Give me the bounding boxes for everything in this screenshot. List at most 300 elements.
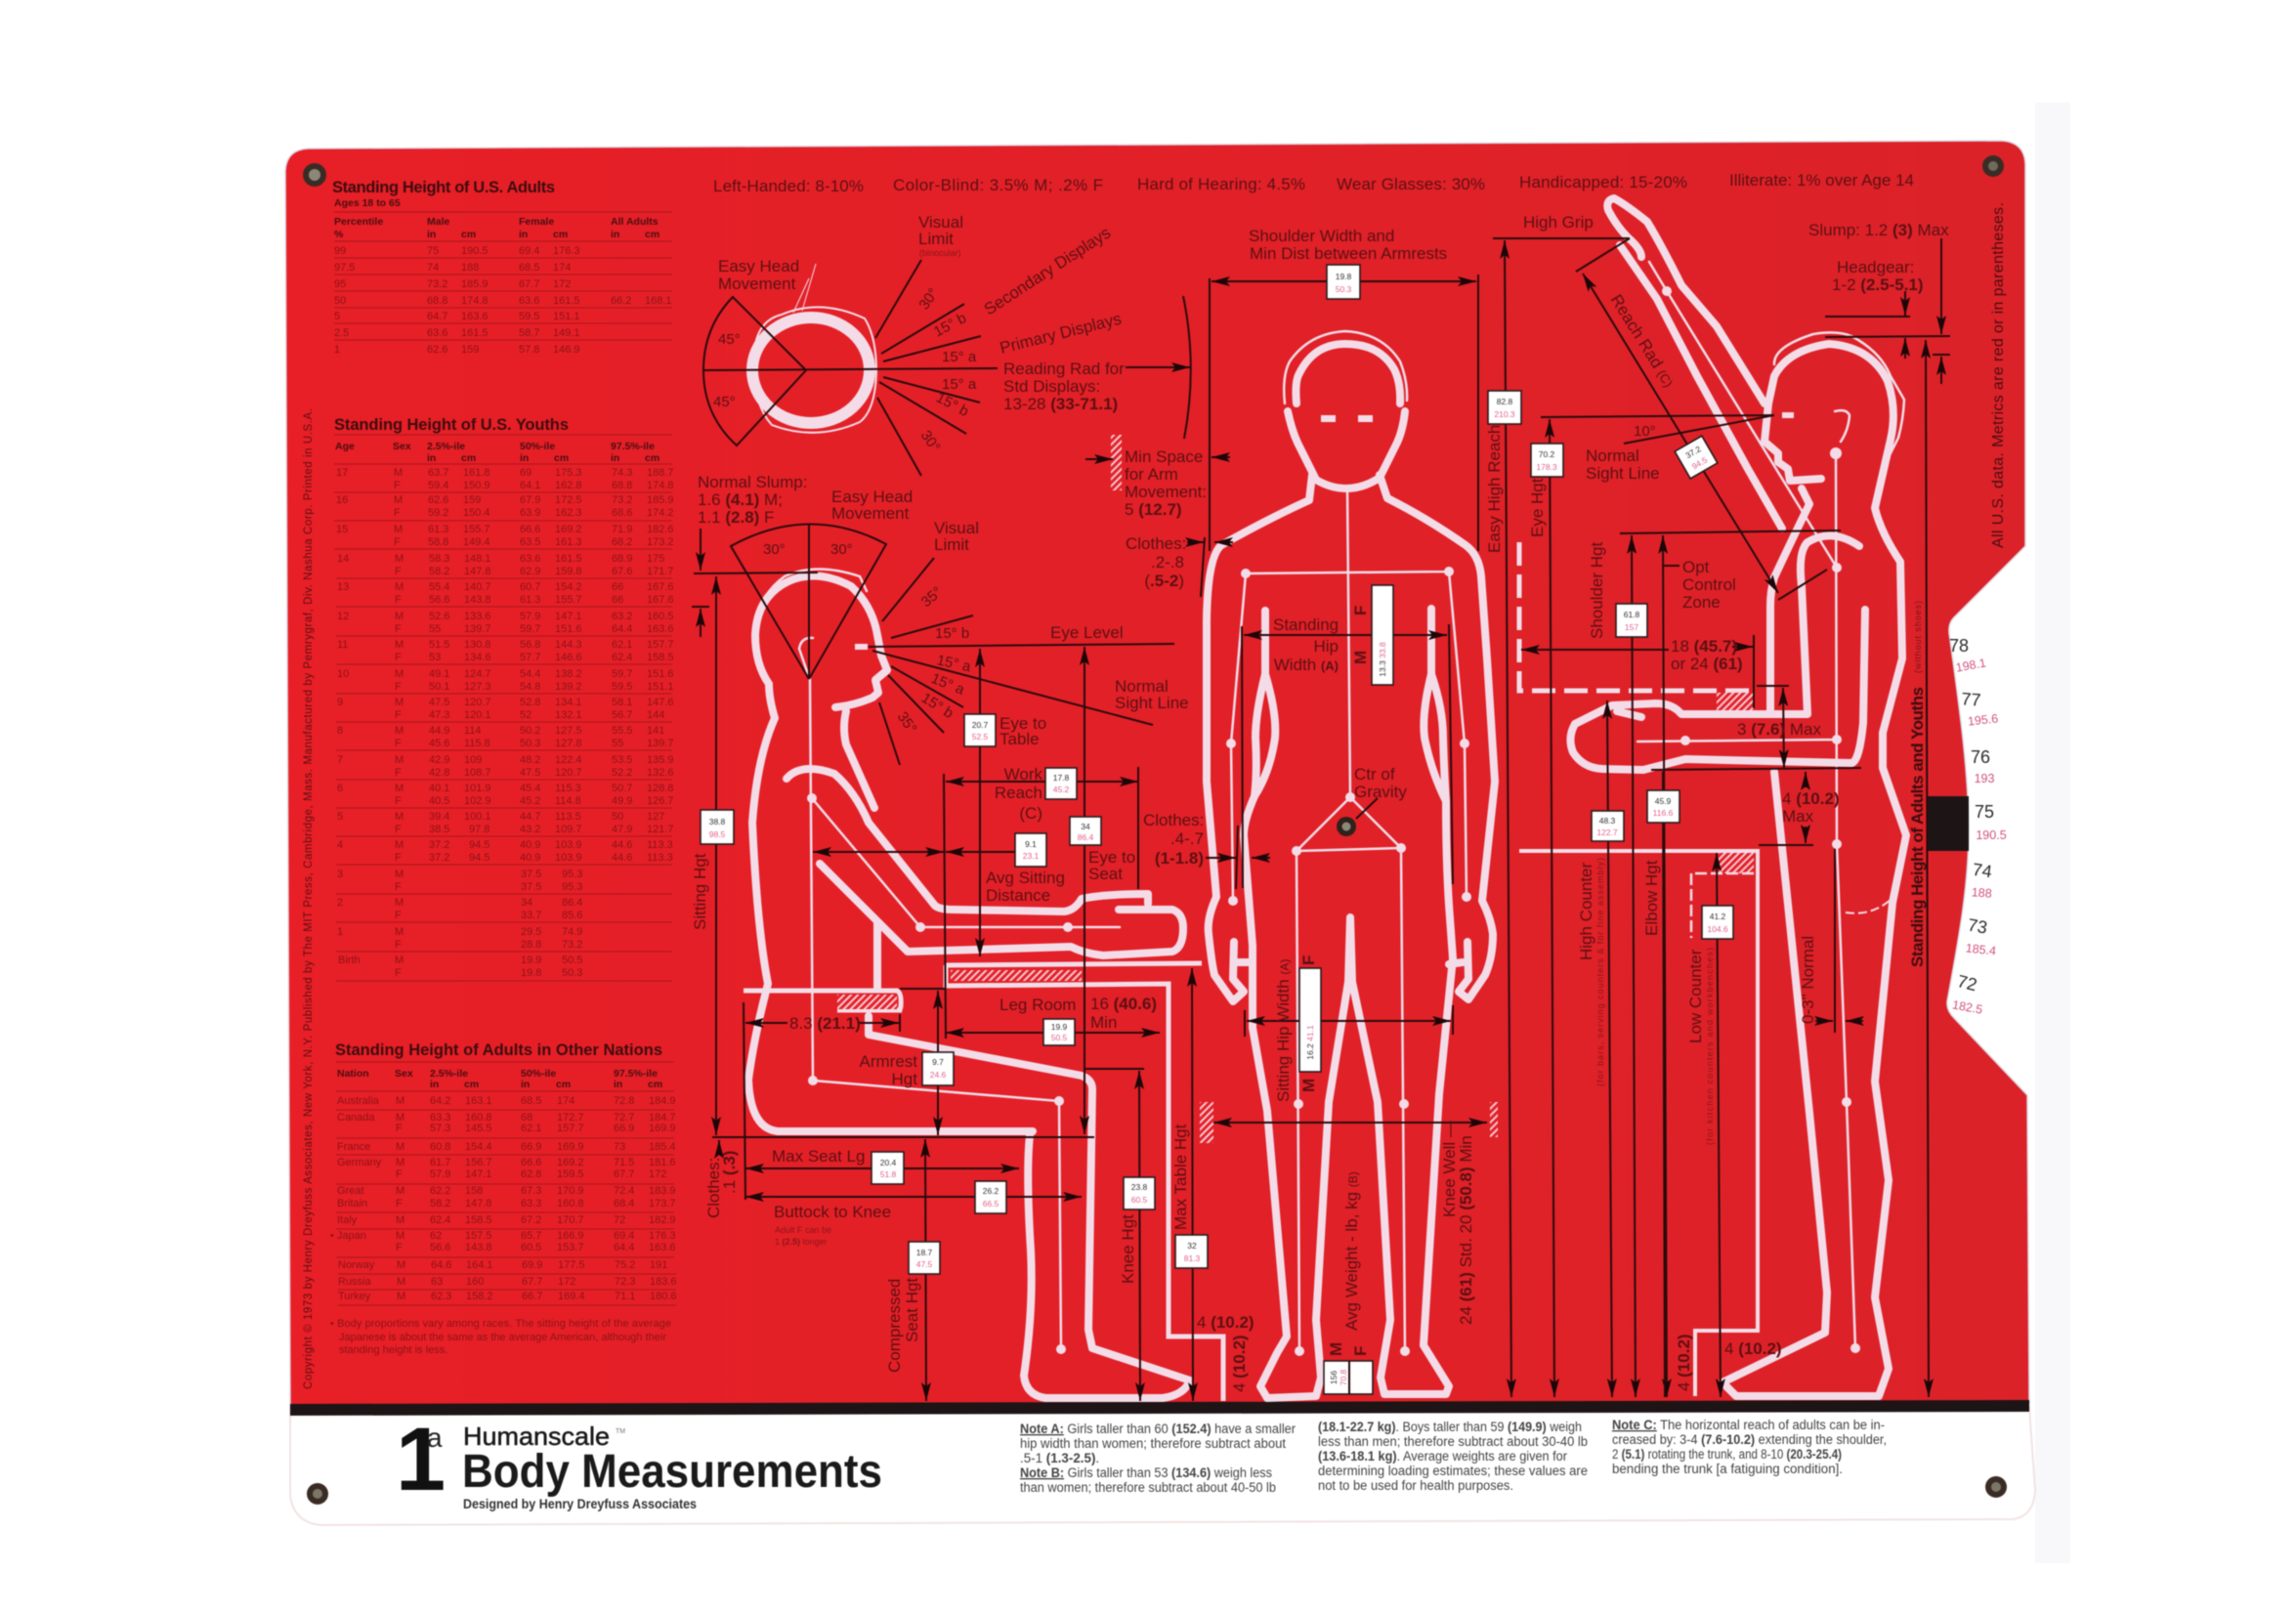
labels: standing side: Sight Line: [1586, 464, 1660, 483]
panel: standing height of US adults table: [332, 179, 672, 356]
rivet top right: [1982, 155, 2004, 177]
labels: standing side: Eye Hgt: [1528, 478, 1547, 537]
eyes: [1321, 415, 1373, 422]
statistics strip: Illiterate: 1% over Age 14: [1729, 171, 1914, 190]
panel: standing height of US adults table: 174.8: [461, 295, 489, 307]
numeral 1a: 1: [396, 1410, 446, 1509]
labels: standing side: 18 (45.7): [1671, 637, 1737, 656]
labels: standing side: or 24 (61): [1671, 655, 1743, 673]
panel: standing height of US adults table: 63.6: [519, 295, 539, 307]
panel: standing height of adults in other nations table: 71.5: [614, 1157, 634, 1168]
labels: standing side: High Grip: [1523, 213, 1594, 232]
height dial numbers: 190.5: [1976, 828, 2007, 842]
height dial numbers: 193: [1975, 772, 1994, 785]
labels: angles: [713, 285, 977, 455]
labels: seated figure: 30°: [763, 541, 786, 558]
high grip and easy high reach: [1493, 238, 1630, 1397]
head outline: [1288, 344, 1405, 488]
panel: standing height of adults in other nations table: 147.1: [465, 1168, 492, 1180]
panel: standing height of adults in other nations table: M: [397, 1291, 405, 1302]
panel: standing height of US youths table: 45.4: [520, 783, 540, 794]
panel: standing height of US youths table: 50.3: [520, 738, 540, 749]
value box: shoulder width: 19.8: [1336, 272, 1352, 281]
value box: easy high reach: [1488, 391, 1521, 424]
panel: standing height of adults in other nations table: 62.8: [521, 1168, 541, 1180]
labels: seated figure: 15° a: [929, 670, 967, 699]
numeral 1a: a: [427, 1422, 443, 1453]
panel: standing height of adults in other nations table: 57.9: [430, 1168, 450, 1180]
panel: standing height of US youths table: 167.6: [647, 594, 674, 606]
labels: standing figure: (.5-2): [1144, 572, 1184, 590]
value box: leg room: 50.5: [1051, 1033, 1068, 1042]
panel: standing height of adults in other nations table: Turkey: [338, 1291, 371, 1302]
panel: standing height of US youths table: F: [395, 709, 402, 721]
panel: standing height of US youths table: 40.5: [429, 795, 449, 807]
panel: standing height of US youths table: 51.5: [429, 639, 449, 651]
panel: standing height of US youths table: 59.4: [428, 480, 448, 491]
panel: standing height of US youths table: 29.5: [521, 926, 541, 938]
panel: standing height of US youths table: 61.3: [428, 524, 448, 535]
notes column 1: [1020, 1421, 1297, 1495]
notes column 2: (18.1-22.7 kg). Boys taller than 59 (149.9) weigh: [1318, 1420, 1582, 1434]
panel: standing height of US youths table: 58.3: [429, 553, 449, 565]
notes column 1: Note A: Girls taller than 60 (152.4) have a smaller: [1020, 1421, 1297, 1436]
labels: standing figure: .2-.8: [1151, 553, 1184, 572]
labels: seated figure: 15° b: [918, 690, 957, 722]
height dial numbers: 195.6: [1967, 711, 1999, 729]
diagram: top view of head with vision angles: [703, 213, 1191, 476]
panel: standing height of US youths table: 47.3: [429, 709, 449, 721]
notes column 3: creased by: 3-4 (7.6-10.2) extending the shoulder,: [1612, 1432, 1887, 1447]
panel: standing height of US youths table: 162.3: [555, 507, 582, 519]
panel: standing height of US youths table: 175.3: [555, 467, 582, 479]
display arc: [1183, 296, 1191, 439]
panel: standing height of US youths table: 59.2: [428, 507, 448, 519]
panel: standing height of adults in other nations table: 67.3: [521, 1185, 541, 1197]
panel: standing height of adults in other nations table: 67.2: [521, 1214, 541, 1226]
panel: standing height of US youths table: 1: [337, 926, 343, 938]
panel: standing height of US youths table: 113.3: [647, 852, 673, 864]
labels: standing side: [1485, 202, 2007, 1391]
panel: standing height of adults in other nations table: M: [396, 1095, 404, 1107]
panel: standing height of adults in other nations table: M: [397, 1259, 405, 1271]
value box: compressed seat: 47.5: [916, 1259, 933, 1269]
panel: standing height of US youths table: F: [395, 566, 402, 577]
panel: standing height of US youths table: 68.2: [612, 536, 632, 548]
panel: standing height of adults in other nations table: 180.6: [650, 1291, 677, 1302]
value box: knee height: 23.8: [1131, 1182, 1148, 1192]
panel: standing height of US youths table: 95.3: [562, 881, 582, 893]
labels: seated figure: (C): [1019, 804, 1042, 823]
head ring: [752, 264, 876, 433]
panel: standing height of adults in other nations table: M: [396, 1157, 404, 1168]
panel: standing height of adults in other nations table: 62: [430, 1230, 442, 1242]
panel: standing height of US youths table: 42.9: [429, 754, 449, 766]
labels: standing side: All U.S. data. Metrics are red or in parentheses.: [1990, 202, 2007, 548]
leg room: [946, 1032, 1160, 1034]
panel: standing height of US youths table: 55: [612, 738, 623, 749]
height scale label: Standing Height of Adults and Youths: [1908, 687, 1927, 967]
panel: standing height of US youths table: 121.7: [647, 824, 674, 835]
panel: standing height of US youths table: cm: [461, 452, 476, 464]
panel: standing height of US youths table: 50.1: [429, 681, 449, 693]
panel: standing height of US youths table: 124.7: [464, 668, 491, 680]
panel: standing height of US youths table: M: [395, 553, 404, 565]
panel: standing height of adults in other nations table: 176.3: [649, 1230, 676, 1242]
panel: standing height of US youths table: 174.2: [647, 507, 674, 519]
panel: standing height of adults in other nations table: 164.1: [466, 1259, 493, 1271]
panel: standing height of adults in other nations table: 169.9: [557, 1141, 584, 1153]
labels: seated figure: 1.1 (2.8) F: [698, 508, 774, 527]
right arm: [1380, 475, 1495, 999]
panel: standing height of US adults table: in: [611, 229, 619, 240]
labels: standing side: Opt: [1682, 558, 1710, 576]
panel: standing height of US youths table: F: [395, 910, 402, 921]
panel: standing height of US youths table: 52.8: [520, 697, 540, 708]
panel: standing height of US youths table: 6: [337, 783, 343, 794]
panel: standing height of adults in other nations table: 154.4: [465, 1141, 492, 1153]
panel: standing height of adults in other nations table: 145.5: [465, 1123, 492, 1134]
compressed seat height: [925, 1139, 926, 1401]
labels: seated figure: Sitting Hgt: [691, 853, 709, 930]
panel: standing height of US youths table: 68.8: [612, 480, 632, 491]
panel: standing height of US youths table: 159: [463, 494, 481, 506]
panel: standing height of adults in other nations table: Norway: [338, 1259, 375, 1271]
panel: standing height of US youths table: 95.3: [562, 869, 582, 880]
diagram: seated vision angles and dimensions: [691, 473, 1254, 1401]
panel: standing height of US youths table: 161.3: [555, 536, 582, 548]
labels: seated figure: Max Table Hgt: [1171, 1124, 1190, 1230]
panel: standing height of adults in other nations table: in: [521, 1079, 530, 1090]
panel: standing height of US youths table: 134.1: [555, 697, 582, 708]
panel: standing height of US youths table: F: [395, 623, 402, 635]
panel: standing height of US youths table: 138.2: [555, 668, 582, 680]
panel: standing height of US youths table: 63.2: [612, 611, 632, 622]
panel: standing height of US adults table: Female: [519, 216, 554, 228]
value box: armrest: 24.6: [930, 1070, 947, 1080]
labels: standing figure: Gravity: [1354, 783, 1407, 801]
labels: standing side: Headgear:: [1837, 258, 1914, 276]
labels: seated figure: Knee Hgt: [1119, 1214, 1137, 1284]
panel: standing height of adults in other nations table: 68.5: [521, 1095, 541, 1107]
panel: standing height of US youths table: cm: [554, 452, 569, 464]
panel: standing height of adults in other nations table: 172: [558, 1276, 575, 1288]
labels: angles: 15° b: [933, 390, 971, 420]
notes column 3: bending the trunk [a fatiguing condition].: [1612, 1462, 1843, 1476]
panel: standing height of US adults table: 159: [461, 344, 479, 356]
panel: standing height of adults in other nations table: 66.9: [614, 1123, 634, 1134]
panel: standing height of adults in other nations table: in: [430, 1079, 439, 1090]
skeleton: [1231, 488, 1467, 1351]
panel: standing height of adults in other nations table: F: [396, 1123, 403, 1134]
labels: seated figure: Min: [1090, 1013, 1117, 1032]
value box: elbow height: 45.9: [1655, 796, 1672, 806]
centre of gravity rivet: [1337, 798, 1378, 836]
labels: seated figure: 1.6 (4.1) M;: [698, 490, 783, 509]
labels: display types: Reading Rad for: [1003, 360, 1125, 378]
eye to table and eye to seat dimensions: [980, 647, 1084, 1134]
panel: standing height of US youths table: 173.2: [647, 536, 674, 548]
panel: standing height of US adults table: in: [427, 229, 436, 240]
labels: display types: 13-28 (33-71.1): [1003, 395, 1118, 413]
statistics strip: Handicapped: 15-20%: [1519, 173, 1687, 191]
panel: standing height of US youths table: 50.3: [562, 967, 582, 979]
panel: standing height of US youths table: 127.5: [555, 725, 582, 737]
panel: standing height of US youths table: 185.9: [647, 494, 674, 506]
head movement wedge: [703, 297, 998, 445]
panel: standing height of adults in other nations table: in: [614, 1079, 622, 1090]
panel: standing height of adults in other nations table: 169.4: [558, 1291, 585, 1302]
panel: standing height of US youths table: F: [394, 480, 401, 491]
panel: standing height of US adults table: 151.1: [553, 311, 580, 322]
panel: standing height of US youths table: 56.7: [612, 709, 632, 721]
statistics strip: Left-Handed: 8-10%: [713, 177, 864, 195]
panel: standing height of US youths table: 63.9: [520, 507, 540, 519]
panel: standing height of US adults table: 67.7: [519, 278, 539, 290]
panel: standing height of adults in other nations table: Canada: [337, 1112, 375, 1124]
panel: standing height of US youths table: 59.7: [612, 668, 632, 680]
head, back and leg: [1722, 344, 1906, 1396]
labels: standing side: 3 (7.6) Max: [1737, 720, 1821, 739]
slump and headgear marks: [1825, 238, 1950, 384]
panel: standing height of adults in other nations table: Italy: [337, 1214, 358, 1226]
panel: standing height of US youths table: 54.8: [520, 681, 540, 693]
panel: standing height of US youths table: M: [395, 611, 404, 622]
panel: standing height of adults in other nations table: F: [396, 1168, 403, 1180]
value box: sitting hip width: [1299, 968, 1321, 1072]
labels: standing side: Max: [1782, 807, 1814, 826]
panel: standing height of US youths table: 108.7: [464, 767, 491, 779]
value box: elbow height: 116.6: [1653, 808, 1674, 818]
panel: standing height of US youths table: 149.4: [463, 536, 490, 548]
labels: standing figure: Min Dist between Armrests: [1250, 244, 1447, 263]
panel: standing height of US youths table: 114.8: [555, 795, 581, 807]
panel: standing height of adults in other nations table: Great: [337, 1185, 364, 1197]
panel: standing height of adults in other nations table: cm: [464, 1079, 479, 1090]
labels: standing figure: Ctr of: [1354, 765, 1395, 784]
diagram: min space for arm movement: 5 (12.7): [1125, 500, 1182, 519]
panel: standing height of US youths table: M: [394, 467, 403, 479]
labels: standing side: 0-3" Normal: [1799, 936, 1817, 1024]
panel: standing height of US youths table: 182.6: [647, 524, 674, 535]
panel: standing height of adults in other nations table: F: [396, 1242, 403, 1253]
panel: standing height of US youths table: 53.5: [612, 754, 632, 766]
panel: standing height of adults in other nations table: 60.8: [430, 1141, 450, 1153]
panel: standing height of adults in other nations table: 169.9: [649, 1123, 676, 1134]
opt control zone: [1663, 535, 1679, 1397]
labels: standing figure: Shoulder Width and: [1249, 227, 1394, 245]
labels: angles: 15° a: [942, 376, 977, 393]
panel: standing height of US youths table: 143.8: [464, 594, 491, 606]
knee height: [1085, 1069, 1144, 1401]
panel: standing height of US youths table: 58.8: [428, 536, 448, 548]
panel: standing height of adults in other nations table: M: [396, 1230, 404, 1242]
panel: standing height of US youths table: M: [395, 754, 404, 766]
value box: max table: 32: [1187, 1241, 1197, 1251]
panel: standing height of US youths table: 158.5: [647, 652, 674, 663]
labels: standing side: 4 (10.2): [1724, 1339, 1782, 1358]
max seat length: [745, 1167, 1019, 1169]
panel: standing height of US youths table: 69: [520, 467, 531, 479]
panel: standing height of US adults table: 64.7: [427, 311, 447, 322]
labels: seated figure: 35°: [894, 709, 920, 737]
panel: standing height of US youths table: 132.1: [555, 709, 582, 721]
panel: standing height of US youths table: 126.7: [647, 795, 674, 807]
high counter, elbow, low counter dimensions: [1607, 700, 1721, 1397]
panel: standing height of adults in other nations table: 2.5%-ile: [430, 1068, 468, 1080]
credit line vertical: Copyright © 1973 by Henry Dreyfuss Associates, New York, N.Y. Published by The MIT Press, Cambridge, Mass. Manufactured by Pemrygraf, Div. Nashua Corp. Printed in U.S.A.: [303, 408, 315, 1389]
diagram: min space for arm movement: [1085, 435, 1207, 519]
knee well: [1200, 1102, 1498, 1143]
value box: knee height: [1124, 1177, 1155, 1209]
labels: standing figure: F: [1351, 1346, 1370, 1356]
labels: standing figure: Standing: [1273, 615, 1339, 634]
panel: standing height of US youths table: 45.6: [429, 738, 449, 749]
value box: shoulder width: [1327, 265, 1360, 299]
panel: standing height of US adults table: 59.5: [519, 311, 539, 322]
labels: visual limit: Limit: [918, 230, 954, 248]
value box: low counter: [1702, 906, 1733, 939]
panel: standing height of US adults table: 1: [334, 344, 340, 356]
labels: angles: 45°: [713, 394, 736, 410]
panel: standing height of US youths table: 141: [647, 725, 664, 737]
panel: standing height of US youths table: 68.9: [612, 553, 632, 565]
panel: standing height of US youths table: 97.5%-ile: [611, 441, 655, 452]
panel: standing height of US youths table: 53: [429, 652, 441, 663]
panel: standing height of US youths table: 28.8: [521, 939, 541, 951]
panel: standing height of adults in other nations table: 158: [465, 1185, 483, 1197]
panel: standing height of US youths table: 120.7: [555, 767, 582, 779]
panel: standing height of US youths table: M: [395, 926, 404, 938]
labels: seated figure: Reach: [995, 784, 1042, 802]
labels: display types: Secondary Displays: [981, 224, 1114, 318]
panel: standing height of adults in other nations table: 160.8: [557, 1198, 584, 1209]
panel: standing height of US youths table: 133.6: [464, 611, 491, 622]
panel: standing height of US youths table: 56.8: [520, 639, 540, 651]
labels: standing figure: M: [1327, 1342, 1345, 1356]
hair and ear: [1774, 332, 1904, 461]
panel: standing height of US youths table: 59.7: [520, 623, 540, 635]
value box: easy high reach: 82.8: [1497, 397, 1513, 406]
panel: standing height of US youths table: 44.6: [612, 852, 632, 864]
value box: avg weight: [1324, 1361, 1373, 1394]
panel: standing height of US youths table: Sex: [393, 441, 411, 452]
panel: standing height of US youths table: 114: [464, 725, 482, 737]
max table height: [1192, 968, 1193, 1401]
panel: standing height of adults in other nations table: 68: [521, 1112, 532, 1124]
slump marks: [692, 573, 818, 607]
panel: standing height of US youths table: M: [395, 639, 404, 651]
labels: standing figure: F: [1299, 955, 1318, 965]
labels: angles: 30°: [915, 285, 942, 313]
panel: standing height of US youths table: 52.2: [612, 767, 632, 779]
panel: standing height of US youths table: 140.7: [464, 581, 491, 593]
panel: standing height of US youths table: cm: [645, 452, 659, 464]
panel: standing height of US adults table: Male: [427, 216, 450, 228]
panel: standing height of US youths table: M: [395, 811, 404, 823]
panel: standing height of US youths table: F: [395, 795, 402, 807]
product name: TM: [616, 1428, 625, 1435]
panel: standing height of adults in other nations table: 72.7: [614, 1112, 634, 1124]
panel: standing height of adults in other nations table: 71.1: [615, 1291, 635, 1302]
panel: standing height of US youths table: 109: [464, 754, 482, 766]
panel: standing height of US youths table: M: [395, 897, 404, 909]
panel: standing height of US youths table: 58.1: [612, 697, 632, 708]
chair seat: [744, 991, 901, 1010]
panel: standing height of US youths table: 47.9: [612, 824, 632, 835]
panel: standing height of US youths table: 62.1: [612, 639, 632, 651]
labels: standing figure: Width (A): [1274, 656, 1339, 674]
value box: eye to table: [964, 714, 996, 746]
panel: standing height of US youths table: 147.1: [555, 611, 582, 622]
panel: standing height of US youths table: 19.9: [521, 954, 541, 966]
labels: seated figure: 16 (40.6): [1090, 995, 1157, 1013]
labels: easy head movement: Movement: [718, 275, 796, 293]
labels: seated figure: .1 (.3): [720, 1151, 739, 1194]
panel: standing height of US adults table: 63.6: [427, 327, 447, 339]
value box: buttock to knee: 66.5: [983, 1199, 999, 1209]
panel: standing height of US youths table: 134.6: [464, 652, 491, 663]
panel: standing height of adults in other nations table: 177.5: [558, 1259, 585, 1271]
panel: standing height of US youths table: 54.4: [520, 668, 540, 680]
panel: standing height of US youths table: 2: [337, 897, 343, 909]
panel: standing height of US youths table: 115.8: [464, 738, 490, 749]
dashed work zone: [1519, 542, 1756, 710]
footnote: standing height is less.: [339, 1344, 447, 1356]
panel: standing height of adults in other nations table: 166.9: [557, 1230, 584, 1242]
footnote: • Body proportions vary among races. The sitting height of the average: [330, 1318, 671, 1330]
panel: standing height of US youths table: in: [427, 452, 436, 464]
work reach dimension: [944, 767, 1138, 1039]
skeleton: [810, 679, 1120, 1349]
panel: standing height of US youths table: 175: [647, 553, 664, 565]
height scale label: (without shoes): [1913, 601, 1923, 673]
panel: standing height of US youths table: 64.4: [612, 623, 632, 635]
panel: standing height of US youths table: 127.8: [555, 738, 582, 749]
panel: standing height of US youths table: 169.2: [555, 524, 582, 535]
value box: reach radius: 94.5: [1690, 454, 1709, 472]
clothes 4-.7 arrows: [1206, 826, 1270, 889]
value box: max seat: [872, 1152, 904, 1184]
panel: standing height of US youths table: F: [395, 824, 402, 835]
panel: standing height of US youths table: 146.6: [555, 652, 582, 663]
eye: [1782, 412, 1794, 418]
panel: standing height of US youths table: 62.6: [428, 494, 448, 506]
notes column 1: .5-1 (1.3-2.5).: [1020, 1451, 1099, 1465]
rivet top left: [303, 163, 326, 187]
clothes ticks: [1187, 537, 1233, 597]
panel: standing height of US youths table: F: [395, 681, 402, 693]
value box: eye to table: 20.7: [972, 720, 989, 730]
panel: standing height of US youths table: 73.2: [612, 494, 632, 506]
labels: standing figure: F: [1351, 606, 1370, 615]
labels: standing side: 10°: [1634, 423, 1656, 440]
panel: standing height of adults in other nations table: 61.7: [430, 1157, 450, 1168]
heading: US adults: Standing Height of U.S. Adults: [332, 179, 555, 196]
panel: standing height of US youths table: 59.5: [612, 681, 632, 693]
panel: standing height of US adults table: 174: [553, 262, 571, 274]
labels: standing side: Low Counter: [1686, 949, 1705, 1043]
value box: work reach: 17.8: [1053, 773, 1070, 783]
height dial numbers: [1949, 636, 2007, 1017]
panel: standing height of US youths table: 3: [337, 869, 343, 880]
min arm space arrow: [1212, 456, 1230, 458]
panel: standing height of US adults table: cm: [645, 229, 659, 240]
panel: standing height of US youths table: 86.4: [562, 897, 582, 909]
panel: standing height of US youths table: 19.8: [521, 967, 541, 979]
panel: standing height of US adults table: 188: [461, 262, 479, 274]
panel: standing height of adults in other nations table: 156.7: [465, 1157, 492, 1168]
